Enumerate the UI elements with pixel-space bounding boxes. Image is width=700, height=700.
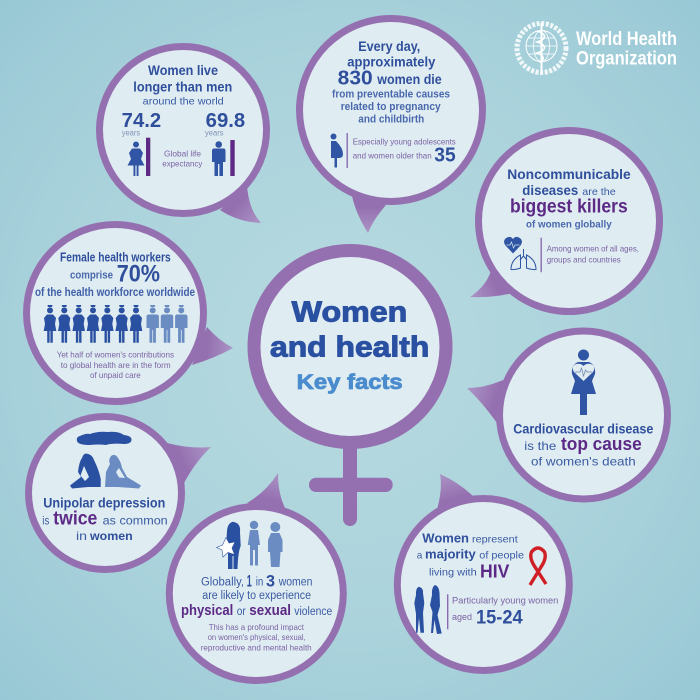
icon: man	[212, 141, 226, 176]
icon row: nurses, seven of ten highlighted	[44, 305, 188, 343]
text: twice as common: women	[89, 529, 133, 543]
text: one in three women: physical	[181, 603, 233, 619]
icon: woman	[128, 142, 144, 176]
text: women majority living with HIV: majority	[425, 546, 476, 561]
text: twice as common: as common	[103, 513, 168, 527]
note: unpaid care: Yet half of women's contributions	[57, 350, 174, 360]
heading: biggest killers: diseases	[522, 182, 578, 198]
heading: biggest killers: are the	[582, 186, 616, 198]
panel: health workers	[23, 221, 233, 405]
note: profound impact: on women's physical, sexual,	[208, 632, 306, 642]
bar: women life expectancy	[146, 138, 150, 176]
heading: women live longer: Women live	[148, 63, 218, 78]
panel: depression	[25, 413, 211, 573]
heading: biggest killers: Noncommunicable	[507, 166, 631, 182]
stat: men 69.8 years: 69.8	[206, 110, 245, 132]
note: among women of all ages: Among women of all ages,	[547, 244, 639, 254]
heading: 70 percent of workforce: Female health workers	[60, 250, 171, 264]
text: women majority living with HIV: Women	[422, 530, 469, 545]
text: organization name: Organization	[576, 48, 677, 70]
note: young women aged 15-24: Particularly young women	[452, 595, 558, 605]
text: organization name: World Health	[576, 29, 677, 50]
panel: cardiovascular disease	[467, 328, 671, 502]
panel: noncommunicable diseases	[470, 127, 663, 315]
text: organization name	[576, 29, 677, 70]
panel: life expectancy	[96, 43, 270, 223]
text: twice as common: is	[42, 513, 49, 527]
text: top cause of death: is the	[524, 439, 557, 453]
icon: pregnant woman	[330, 134, 343, 168]
heading: biggest killers	[507, 166, 631, 230]
caption: global life expectancy: expectancy	[162, 159, 203, 169]
panel: violence	[166, 473, 347, 684]
text: one in three women: are likely to experience	[202, 590, 311, 602]
note: profound impact: This has a profound impact	[209, 622, 305, 632]
text: twice as common: twice	[53, 508, 97, 529]
note: unpaid care	[57, 350, 174, 380]
text: women majority living with HIV: living with	[429, 566, 477, 578]
text: twice as common	[42, 496, 168, 543]
text: women majority living with HIV	[417, 530, 524, 581]
text: one in three women: violence	[294, 606, 332, 618]
text: women majority living with HIV: represent	[472, 533, 518, 545]
icon: dark cloud	[77, 432, 132, 445]
note: profound impact	[201, 622, 312, 652]
icon: two young women	[414, 585, 442, 634]
text: one in three women	[181, 572, 332, 619]
bar: men life expectancy	[230, 140, 235, 176]
note: unpaid care: of unpaid care	[90, 370, 141, 380]
text: one in three women: in	[256, 576, 263, 588]
text: twice as common: Unipolar depression	[43, 496, 165, 511]
icon: three women	[216, 521, 282, 569]
title: Women	[292, 297, 407, 329]
heading: biggest killers: of women globally	[526, 218, 612, 230]
heading: every day 830 women die: related to pregnancy	[341, 101, 442, 113]
heading: women live longer	[133, 63, 232, 108]
stat: women 74.2 years: years	[122, 129, 140, 138]
caption: global life expectancy: Global life	[164, 149, 201, 159]
text: top cause of death	[513, 421, 654, 468]
title: and health	[270, 332, 429, 364]
text: one in three women: 3	[266, 572, 275, 590]
icon: heart and lungs	[504, 237, 536, 270]
heading: 70 percent of workforce	[35, 250, 195, 299]
text: top cause of death: top cause	[561, 434, 642, 454]
logo: World Health Organization	[517, 23, 677, 73]
icon: red ribbon	[530, 548, 546, 585]
heading: women live longer: longer than men	[133, 80, 232, 94]
stat: women 74.2 years: 74.2	[122, 110, 161, 132]
text: twice as common: in	[76, 529, 87, 543]
note: young adolescents and women older than 35: 35	[434, 145, 456, 167]
heading: 70 percent of workforce: 70%	[117, 261, 160, 288]
text: one in three women: or	[237, 606, 246, 618]
heading: 70 percent of workforce: of the health workforce worldwide	[35, 287, 195, 299]
title	[270, 297, 429, 364]
heading: every day 830 women die: from preventable causes	[332, 88, 450, 100]
panel: HIV	[394, 474, 573, 674]
heading: 70 percent of workforce: comprise	[70, 270, 113, 282]
caption: global life expectancy	[162, 149, 203, 169]
heading: every day 830 women die	[332, 39, 450, 125]
note: among women of all ages: groups and countries	[547, 255, 621, 265]
heading: every day 830 women die: Every day,	[358, 39, 420, 54]
note: young adolescents and women older than 35: and women older than	[353, 150, 432, 160]
note: young adolescents and women older than 35	[353, 137, 456, 167]
note: unpaid care: to global health are in the form	[61, 360, 171, 370]
text: top cause of death: Cardiovascular disease	[513, 421, 654, 436]
stat: men 69.8 years: years	[205, 129, 224, 138]
icon: seated figures	[70, 454, 141, 488]
note: young women aged 15-24: aged	[452, 612, 472, 622]
heading: women live longer: around the world	[143, 96, 224, 108]
note: young women aged 15-24	[452, 595, 558, 628]
panel: central female symbol	[248, 244, 452, 526]
text: top cause of death: of women's death	[531, 454, 636, 468]
heading: every day 830 women die: women die	[376, 72, 442, 87]
stem and crossbar	[309, 440, 393, 526]
note: among women of all ages	[547, 244, 639, 265]
heading: biggest killers: biggest killers	[510, 197, 628, 218]
panel: maternal deaths	[296, 15, 486, 233]
subtitle: Key facts	[297, 371, 403, 394]
note: young women aged 15-24: 15-24	[476, 607, 523, 628]
heading: every day 830 women die: approximately	[347, 54, 436, 70]
text: women majority living with HIV: of people	[479, 549, 524, 561]
heading: every day 830 women die: and childbirth	[358, 113, 425, 125]
text: women majority living with HIV: a	[417, 549, 422, 561]
icon: woman holding heart	[571, 350, 596, 415]
note: profound impact: reproductive and mental health	[201, 642, 312, 652]
text: one in three women: Globally,	[201, 576, 244, 588]
text: one in three women: sexual	[249, 603, 291, 619]
text: one in three women: women	[278, 576, 312, 588]
note: young adolescents and women older than 35: Especially young adolescents	[353, 137, 456, 147]
icon: WHO emblem	[517, 23, 566, 73]
text: one in three women: 1	[247, 572, 252, 590]
text: women majority living with HIV: HIV	[480, 560, 510, 581]
heading: every day 830 women die: 830	[338, 68, 373, 90]
